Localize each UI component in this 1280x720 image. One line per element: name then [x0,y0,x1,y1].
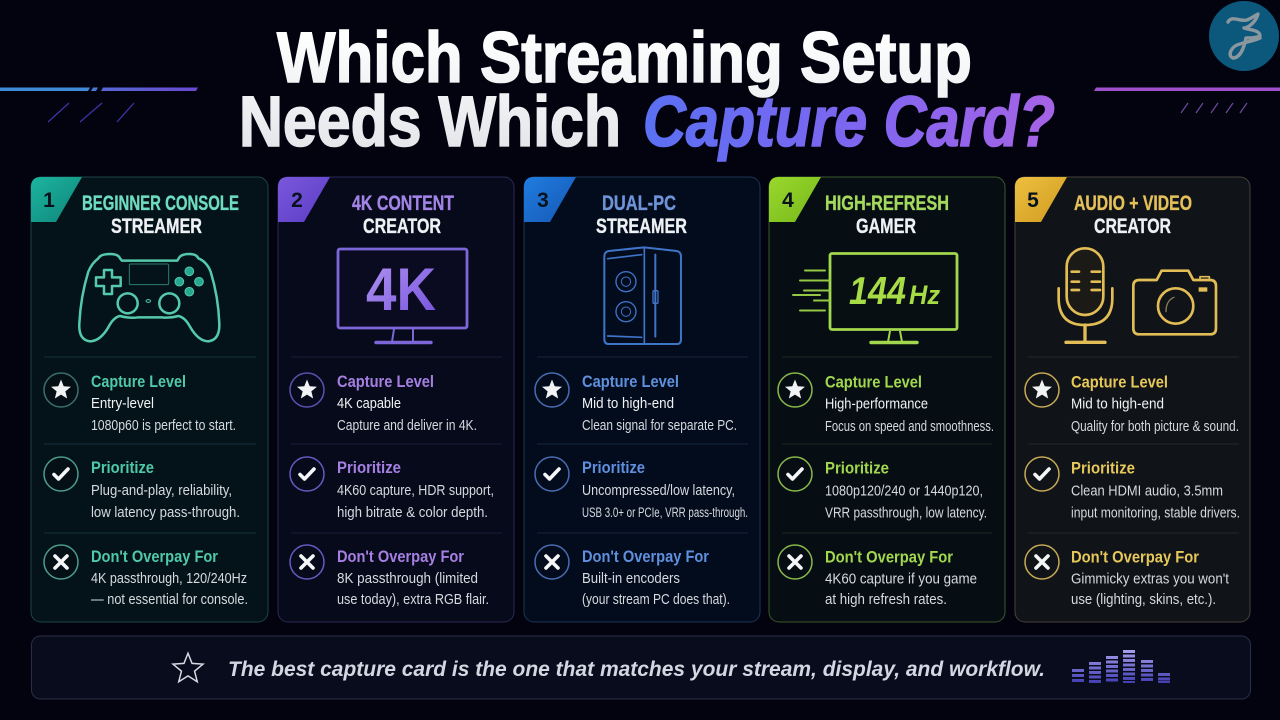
row: don't overpay for: 4K60 capture if you game [825,572,977,588]
accent lines left [0,88,198,122]
row: capture level [1025,372,1239,435]
number badge 4 [769,177,821,222]
card heading [82,191,239,238]
card heading: BEGINNER CONSOLE [82,191,239,215]
row: capture level: Mid to high-end [1071,396,1164,412]
row: prioritize [778,457,987,522]
row: capture level: Capture Level [1071,372,1168,392]
row: capture level [290,372,477,434]
row: don't overpay for: Gimmicky extras you won't [1071,572,1229,588]
row: prioritize: Prioritize [1071,458,1135,478]
number badge 2 [278,177,330,222]
card heading: HIGH-REFRESH [825,191,949,215]
panel: card 5 audio + video creator [1015,177,1250,622]
row: capture level: Clean signal for separate PC. [582,418,737,434]
row: don't overpay for: use (lighting, skins, etc.). [1071,592,1216,608]
card heading [352,191,454,238]
accent lines right [1094,88,1280,113]
panel: footer callout [32,636,1250,699]
row: capture level: 1080p60 is perfect to start. [91,418,236,434]
row: don't overpay for: — not essential for console. [91,592,248,608]
row: prioritize: Prioritize [582,458,645,477]
row: don't overpay for: Don't Overpay For [1071,548,1199,566]
number badge 4: 4 [782,189,794,212]
row: prioritize: USB 3.0+ or PCIe, VRR pass-through. [582,505,748,520]
row: don't overpay for: Don't Overpay For [337,547,464,566]
row: prioritize: high bitrate & color depth. [337,505,488,521]
row: don't overpay for: (your stream PC does that). [582,592,730,608]
row: don't overpay for: Don't Overpay For [582,547,709,566]
number badge 2: 2 [291,189,303,212]
row: prioritize: Uncompressed/low latency, [582,483,735,499]
icon: equalizer bars [1072,650,1170,683]
card heading: CREATOR [363,214,441,238]
row: don't overpay for: at high refresh rates. [825,592,947,608]
row: capture level [535,372,737,434]
panel: card 3 dual-PC streamer [524,177,760,622]
icon: PC tower [604,247,681,344]
row: capture level: Focus on speed and smoothness. [825,419,994,435]
card heading: STREAMER [596,214,687,238]
row: capture level: Capture Level [91,372,186,391]
number badge 1: 1 [43,189,55,212]
icon: game controller [79,254,219,341]
icon: 4K monitor [338,249,467,342]
panel: card 1 beginner console streamer [31,177,268,622]
row: prioritize: 1080p120/240 or 1440p120, [825,484,983,500]
icon: 144Hz monitor: 144 [849,270,906,313]
number badge 3 [524,177,576,222]
row: capture level: Capture Level [825,372,922,392]
card heading [596,191,687,238]
row: prioritize: Clean HDMI audio, 3.5mm [1071,484,1223,500]
number badge 1 [31,177,82,222]
row: prioritize: Prioritize [825,458,889,478]
callout text: The best capture card is the one that matches your stream, display, and workflow. [228,657,1045,681]
icon: outline star [173,653,203,682]
row: prioritize: Prioritize [337,458,401,477]
row: don't overpay for [778,545,977,608]
card heading: AUDIO + VIDEO [1074,191,1192,215]
row: prioritize [290,457,494,521]
card heading: GAMER [856,214,916,238]
row: capture level: Entry-level [91,396,154,412]
row: prioritize: 4K60 capture, HDR support, [337,483,494,499]
title: Capture Card? [643,83,1055,162]
card heading: 4K CONTENT [352,191,454,215]
row: prioritize: Prioritize [91,458,154,477]
number badge 3: 3 [537,189,549,212]
row: don't overpay for: 4K passthrough, 120/240Hz [91,571,247,587]
row: don't overpay for: 8K passthrough (limited [337,571,478,587]
row: prioritize: low latency pass-through. [91,505,240,521]
row: don't overpay for [535,545,730,608]
row: don't overpay for: use today), extra RGB flair. [337,592,489,608]
title: Needs Which [239,83,621,162]
title: Which Streaming Setup [277,19,972,98]
icon: 144Hz monitor [793,254,957,342]
row: capture level: Capture and deliver in 4K. [337,418,477,434]
row: don't overpay for [290,545,489,608]
row: don't overpay for [44,545,248,608]
title [239,19,1055,162]
icon: microphone and camera [1059,248,1216,342]
row: don't overpay for: Don't Overpay For [91,547,218,566]
row: prioritize: input monitoring, stable drivers. [1071,506,1240,522]
row: capture level [778,372,994,435]
row: capture level: Capture Level [337,372,434,391]
card heading: CREATOR [1094,214,1171,238]
card heading: STREAMER [111,214,202,238]
row: capture level: Capture Level [582,372,679,391]
number badge 5: 5 [1027,189,1039,212]
card heading: DUAL-PC [602,191,676,215]
card heading [825,191,949,238]
row: prioritize: VRR passthrough, low latency. [825,506,987,522]
card heading [1074,191,1192,238]
row: prioritize: Plug-and-play, reliability, [91,483,232,499]
row: prioritize [44,457,240,521]
panel: card 2 4K content creator [278,177,514,622]
logo [1209,1,1279,71]
row: capture level: Mid to high-end [582,396,674,412]
row: capture level: Quality for both picture & sound. [1071,419,1239,435]
row: capture level [44,372,236,434]
row: don't overpay for: Built-in encoders [582,571,680,587]
number badge 5 [1015,177,1067,222]
row: don't overpay for [1025,545,1229,608]
row: prioritize [1025,457,1240,522]
row: prioritize [535,457,748,520]
row: capture level: High-performance [825,396,928,412]
panel: card 4 high-refresh gamer [769,177,1005,622]
icon: 144Hz monitor: Hz [909,280,940,310]
icon: 4K monitor: 4K [366,256,436,323]
row: capture level: 4K capable [337,396,401,412]
row: don't overpay for: Don't Overpay For [825,548,953,566]
